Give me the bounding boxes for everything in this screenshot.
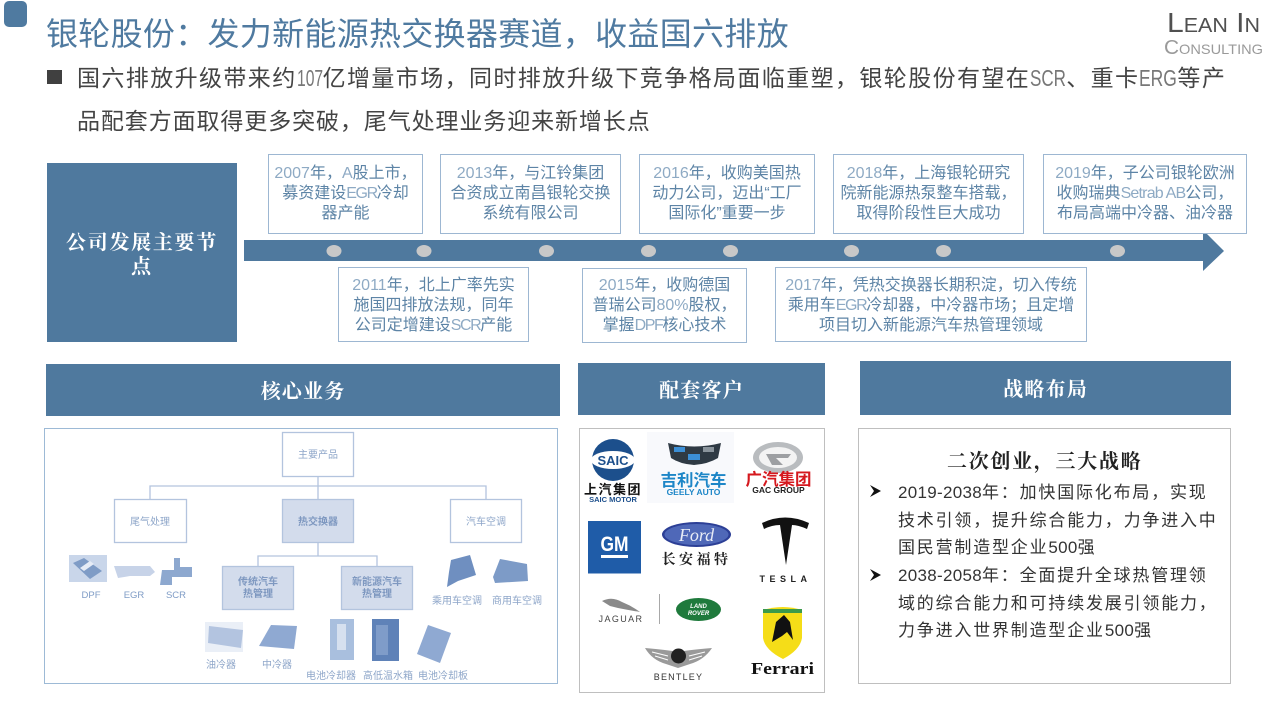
milestone 2015: 普瑞公司80%股权， [592,297,737,314]
heading: core business: 核心业务 [261,375,345,404]
panel: strategy [858,428,1231,684]
milestone 2013: 2013年，与江铃集团 [457,165,604,182]
heading: strategy [860,361,1231,415]
tree node: new energy vehicle thermal management [342,566,412,610]
logo: Land Rover: LAND [690,604,707,610]
product: battery cold plate [417,625,468,682]
milestone 2017: 2017年，凭热交换器长期积淀，切入传统 [785,277,1077,294]
strategy item 1: 技术引领，提升综合能力，力争进入中 [898,510,1218,530]
summary line 2: 品配套方面取得更多突破，尾气处理业务迎来新增长点 [77,108,651,134]
logo: Tesla: TESLA [759,574,812,584]
tree node: exhaust treatment [114,500,186,542]
logo: Jaguar [599,594,660,624]
logo: GAC Group [746,442,812,495]
logo: Land Rover [676,598,721,621]
product: intercooler [259,625,297,671]
strategy item 2: 力争进入世界制造型企业500强 [898,621,1153,640]
product: oil cooler: 油冷器 [206,658,236,671]
milestone 2016: 动力公司，迈出“工厂 [652,185,802,202]
logo: SAIC [584,439,642,504]
logo: Geely [647,432,734,503]
milestone 2015: 掌握DPF核心技术 [603,317,726,334]
milestone 2017 [775,267,1087,342]
icon: bullet square [47,70,62,84]
tree node: new energy vehicle thermal management: 新能源汽车 [352,575,402,588]
product: battery chiller: 电池冷却器 [306,669,356,682]
logo: Ferrari: Ferrari [751,659,814,678]
tree node: main products: 主要产品 [298,448,338,461]
panel: milestones label: 点 [131,250,153,279]
logo: Bentley [645,648,712,682]
product: battery chiller [306,619,356,682]
product: commercial vehicle AC: 商用车空调 [492,594,542,607]
logo: Tesla [759,518,812,584]
timeline arrow [244,234,1224,271]
strategy item 1: 国民营制造型企业500强 [898,538,1096,557]
product: passenger car AC: 乘用车空调 [432,594,482,607]
product: commercial vehicle AC [492,559,542,607]
milestone 2015 [582,268,747,343]
tree node: heat exchanger: 热交换器 [298,515,338,528]
logo: Lean In Consulting [1164,7,1263,59]
tree node: traditional vehicle thermal management [222,566,294,610]
milestone 2016: 2016年，收购美国热 [653,165,801,182]
logo: SAIC: 上汽集团 [584,482,642,497]
milestone 2007: 器产能 [321,205,370,222]
logo: SAIC: SAIC [597,453,629,468]
milestone 2007: 2007年，A股上市， [274,165,417,182]
logo: Changan Ford: 长安福特 [662,549,732,569]
panel: milestones label: 公司发展主要节 [66,226,218,255]
icon: corner marker [4,1,27,27]
product: DPF [69,555,107,601]
tree node: new energy vehicle thermal management: 热管理 [362,587,392,600]
logo: GM [588,521,641,574]
product: DPF: DPF [82,590,101,601]
logo: Changan Ford: Ford [678,525,715,545]
logo: Geely: 吉利汽车 [660,470,726,490]
logo: GM: GM [600,533,628,556]
logo: Land Rover: ROVER [688,611,710,617]
product: SCR: SCR [166,590,186,601]
tree node: auto air conditioning: 汽车空调 [466,515,506,528]
summary line 1: 国六排放升级带来约 亿增量市场，同时排放升级下竞争格局面临重塑，银轮股份有望在 、重卡 等产 [77,65,1226,91]
panel: core business product tree [44,428,558,684]
milestone 2013: 合资成立南昌银轮交换 [450,185,610,202]
logo: Lean In Consulting: Consulting [1164,37,1263,59]
tree node: traditional vehicle thermal management: 热管理 [243,587,273,600]
milestone 2016 [639,154,815,234]
milestone 2019: 2019年，子公司银轮欧洲 [1055,165,1235,182]
milestone 2016: 国际化”重要一步 [668,205,786,222]
logo: Ferrari [751,607,814,678]
milestone 2018 [833,154,1024,234]
logo: GAC Group: 广汽集团 [746,469,812,489]
tree node: traditional vehicle thermal management: 传统汽车 [238,575,278,588]
milestone 2019: 布局高端中冷器、油冷器 [1057,205,1233,222]
heading: core business [46,364,560,416]
milestone 2013 [440,154,621,234]
product: water tank: 高低温水箱 [363,669,413,682]
logo: Bentley: BENTLEY [654,672,703,682]
logo: Geely: GEELY AUTO [667,487,721,497]
product: EGR [114,566,155,601]
milestone 2018: 2018年，上海银轮研究 [847,165,1010,182]
tree node: heat exchanger [282,500,354,542]
icon: arrow bullet 2 [870,569,881,581]
product: oil cooler [205,622,243,671]
logo: Changan Ford [662,522,732,569]
strategy heading: 二次创业，三大战略 [947,445,1142,474]
summary line 1: SCR [1030,65,1066,91]
product: intercooler: 中冷器 [262,658,292,671]
strategy item 2 [898,566,1218,640]
tree node: auto air conditioning [450,500,522,542]
milestone 2019 [1043,154,1247,234]
milestone 2017: 项目切入新能源汽车热管理领域 [819,317,1043,334]
milestone 2011: 施国四排放法规，同年 [353,297,514,314]
product: battery cold plate: 电池冷却板 [418,669,468,682]
summary text block [47,65,1226,134]
tree node: exhaust treatment: 尾气处理 [130,515,170,528]
heading: customers: 配套客户 [659,374,744,403]
icon: arrow bullet 1 [870,485,881,497]
logo: GAC Group: GAC GROUP [752,485,805,495]
summary line 1: ERG [1139,65,1177,91]
product: water tank [363,619,413,682]
heading: customers [578,363,825,415]
strategy item 2: 域的综合能力和可持续发展引领能力， [898,594,1218,612]
strategy item 1 [898,483,1218,557]
milestone 2018: 院新能源热泵整车搭载， [840,185,1016,202]
milestone 2011: 公司定增建设SCR产能 [355,317,512,334]
product: passenger car AC [432,555,482,607]
product: EGR: EGR [124,590,144,601]
strategy item 1: 2019-2038年：加快国际化布局，实现 [898,483,1208,502]
milestone 2015: 2015年，收购德国 [599,277,730,294]
tree node: main products [282,432,354,476]
product: SCR [160,558,192,601]
milestone 2007 [268,154,423,234]
milestone 2011 [338,267,529,342]
milestone 2013: 系统有限公司 [482,205,578,222]
heading: strategy: 战略布局 [1003,373,1088,402]
strategy item 2: 2038-2058年：全面提升全球热管理领 [898,566,1208,585]
logo: Jaguar: JAGUAR [599,614,643,624]
summary line 1: 107 [297,65,323,91]
milestone 2019: 收购瑞典Setrab AB公司， [1057,185,1233,202]
title: 银轮股份：发力新能源热交换器赛道，收益国六排放 [46,16,789,52]
milestone 2011: 2011年，北上广率先实 [352,277,515,294]
milestone 2018: 取得阶段性巨大成功 [856,205,1000,222]
logo: Lean In Consulting: Lean In [1167,7,1260,38]
panel: customer logos [579,428,825,693]
panel: milestones label [47,163,237,342]
milestone 2017: 乘用车EGR冷却器，中冷器市场；且定增 [788,297,1074,314]
logo: SAIC: SAIC MOTOR [589,495,637,504]
milestone 2007: 募资建设EGR冷却 [282,185,409,202]
